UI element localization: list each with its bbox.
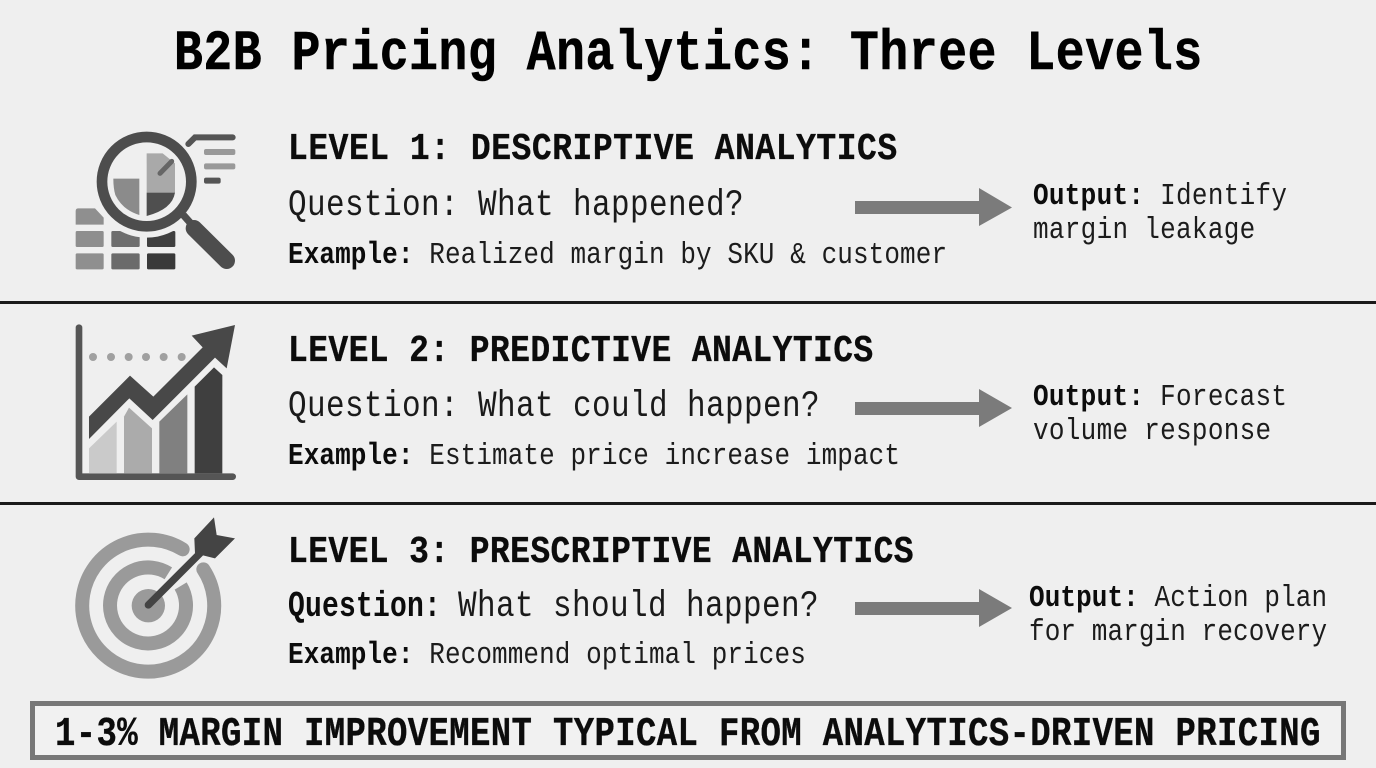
heading: level 3: LEVEL 3: PRESCRIPTIVE ANALYTICS (288, 530, 914, 574)
question: level 1: Question: What happened? (288, 185, 744, 227)
icon: magnifying glass over data grid (76, 126, 235, 269)
question: level 3: What should happen? (458, 586, 819, 628)
output: level 3: Output: Action plan (1029, 582, 1327, 616)
output: level 2: volume response (1033, 415, 1271, 449)
question: level 3: Question: (288, 586, 441, 627)
example: level 1: Example: Realized margin by SKU & customer (288, 239, 947, 273)
icon: rising bar chart with arrow (79, 325, 235, 477)
panel: level 2 predictive analytics (79, 325, 1287, 477)
example: level 3: Example: Recommend optimal prices (288, 639, 806, 673)
output: level 1 (1033, 180, 1287, 248)
heading: level 1: LEVEL 1: DESCRIPTIVE ANALYTICS (288, 127, 898, 171)
icon: target with arrow (82, 517, 235, 672)
example: level 2: Example: Estimate price increase impact (288, 440, 900, 474)
question: level 3 (288, 586, 819, 628)
heading: level 2: LEVEL 2: PREDICTIVE ANALYTICS (288, 329, 874, 373)
output: level 1: Output: Identify (1033, 180, 1287, 214)
callout: margin improvement banner: 1-3% MARGIN IMPROVEMENT TYPICAL FROM ANALYTICS-DRIVEN PRICING (55, 712, 1321, 758)
panel: level 1 descriptive analytics (76, 126, 1287, 273)
output: level 3: for margin recovery (1029, 616, 1327, 650)
title: B2B Pricing Analytics: Three Levels (174, 23, 1203, 86)
output: level 3 (1029, 582, 1327, 650)
output: level 2 (1033, 381, 1287, 449)
output: level 2: Output: Forecast (1033, 381, 1287, 415)
question: level 2: Question: What could happen? (288, 386, 820, 428)
panel: level 3 prescriptive analytics (82, 517, 1327, 673)
output: level 1: margin leakage (1033, 214, 1256, 248)
arrow: level 3 to output (855, 589, 1012, 627)
arrow: level 2 to output (855, 389, 1012, 427)
arrow: level 1 to output (855, 188, 1012, 226)
